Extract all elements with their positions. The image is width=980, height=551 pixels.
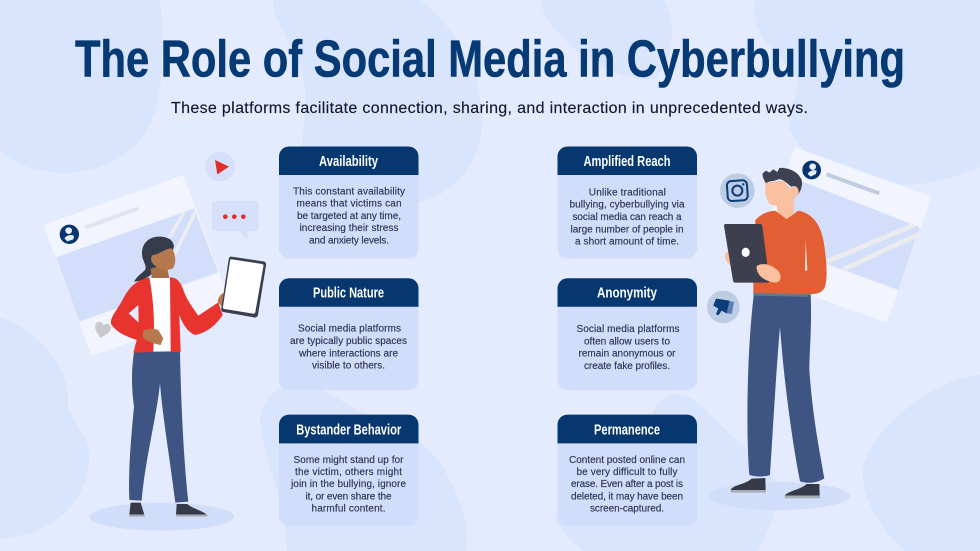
- panel: Anonymity: [558, 278, 697, 390]
- heading: Bystander Behavior: [296, 422, 401, 438]
- social post card behind woman: [43, 175, 232, 356]
- description: a short amount of time.: [575, 236, 679, 248]
- description: [290, 324, 407, 371]
- icon: thumbs down: [707, 291, 740, 323]
- ground shadow: [89, 503, 234, 531]
- card header: [558, 278, 697, 307]
- description: social media can reach a: [572, 212, 682, 223]
- description: often allow users to: [584, 336, 670, 347]
- description: join in the bullying, ignore: [290, 479, 406, 490]
- card header: [279, 278, 418, 307]
- card body: [558, 160, 697, 259]
- description: increasing their stress: [300, 223, 398, 234]
- card header: [558, 415, 697, 443]
- description: visible to others.: [312, 360, 385, 371]
- panel: Public Nature: [279, 278, 418, 390]
- panel: Availability: [279, 146, 418, 259]
- card body: [279, 160, 418, 259]
- description: [293, 186, 405, 246]
- tablet held by man: [724, 224, 781, 283]
- heading: Amplified Reach: [584, 154, 671, 170]
- description: [569, 455, 685, 515]
- card body: [558, 292, 697, 390]
- description: where interactions are: [298, 348, 398, 359]
- description: harmful content.: [312, 504, 386, 515]
- icon: instagram: [720, 173, 755, 208]
- description: and anxiety levels.: [309, 236, 389, 246]
- description: erase. Even after a post is: [571, 479, 683, 490]
- description: Some might stand up for: [294, 455, 404, 466]
- woman figure: [111, 237, 226, 517]
- icon: chat bubble: [212, 201, 259, 239]
- panel: Permanence: [558, 415, 697, 526]
- description: [576, 324, 680, 372]
- heading: Permanence: [594, 422, 660, 438]
- description: This constant availability: [293, 186, 405, 197]
- description: large number of people in: [570, 224, 684, 235]
- social post card behind man: [750, 147, 932, 323]
- description: Content posted online can: [569, 455, 685, 466]
- description: bullying, cyberbullying via: [570, 200, 685, 211]
- illustration: woman with tablet: [43, 152, 266, 531]
- description: [570, 187, 685, 248]
- description: it, or even share the: [306, 491, 392, 502]
- card header: [279, 415, 418, 443]
- description: means that victims can: [296, 199, 402, 210]
- icon: play button: [205, 152, 235, 181]
- description: the victim, others might: [295, 467, 402, 478]
- card header: [279, 146, 418, 175]
- description: create fake profiles.: [584, 361, 670, 372]
- ground shadow: [709, 482, 850, 510]
- heading: Public Nature: [313, 286, 384, 302]
- heading: Anonymity: [597, 286, 658, 302]
- panel: Amplified Reach: [558, 146, 697, 259]
- description: be targeted at any time,: [297, 211, 401, 222]
- heading: Availability: [319, 154, 379, 170]
- description: Social media platforms: [298, 324, 401, 335]
- description: Social media platforms: [576, 324, 680, 335]
- illustration: man with tablet: [707, 147, 932, 510]
- description: remain anonymous or: [578, 349, 676, 360]
- card body: [558, 428, 697, 526]
- card header: [558, 146, 697, 175]
- description: are typically public spaces: [290, 336, 407, 347]
- description: be very difficult to fully: [576, 467, 678, 478]
- description: deleted, it may have been: [571, 491, 683, 502]
- panel: Bystander Behavior: [279, 415, 418, 526]
- man figure: [725, 168, 827, 498]
- card body: [279, 428, 418, 526]
- description: screen-captured.: [590, 504, 664, 515]
- subtitle: These platforms facilitate connection, sharing, and interaction in unprecedented ways.: [171, 100, 808, 117]
- description: [290, 455, 406, 515]
- tablet held by woman: [221, 257, 266, 317]
- card body: [279, 292, 418, 390]
- description: Unlike traditional: [589, 187, 666, 198]
